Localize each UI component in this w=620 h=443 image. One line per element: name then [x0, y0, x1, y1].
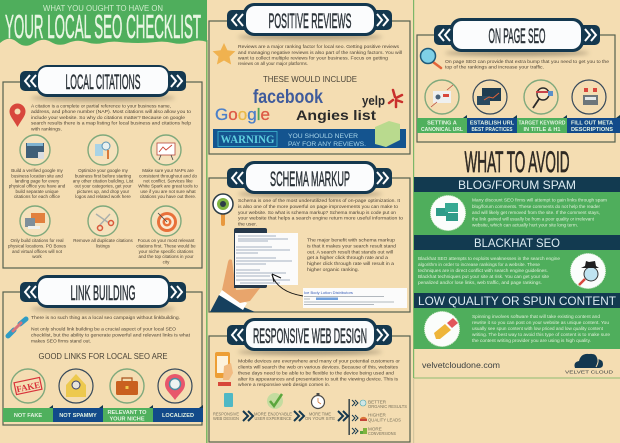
caption: relevant citations: Focus on your most relevant [138, 238, 195, 243]
text: blog spam: blog/forum comments. These comments do not help the reader [472, 204, 600, 209]
text: schema intro [238, 198, 403, 226]
caption: real locations [8, 238, 67, 259]
icon: fake stamp [11, 369, 45, 403]
text: blog spam: and will likely get removed from the site. If the comment stays, [472, 210, 600, 215]
icon: verified location [20, 135, 50, 165]
section: blog forum spam [414, 177, 620, 235]
caption: duplicates: listings [96, 244, 111, 248]
text: citations intro [31, 103, 191, 131]
label: user experience step: MORE ENJOYABLE [254, 412, 292, 416]
text: responsive intro: where a responsive web design comes in. [238, 382, 330, 387]
text: link building intro: Not only should link building be a crucial aspect of your local SEO [31, 327, 176, 332]
labels: on page tactics: CANONICAL URL [421, 127, 464, 133]
caption: optimize: logos and related work here [75, 194, 131, 199]
labels: on page tactics: FILL OUT META [571, 120, 613, 126]
labels: good link qualities: NOT FAKE [14, 413, 42, 419]
caption: optimize: any other citation building. List [73, 178, 134, 184]
heading: responsive web design [227, 318, 392, 355]
text: spun content [472, 314, 610, 343]
text: on page intro: top of the rankings and increase your traffic. [445, 64, 544, 70]
section: blackhat seo: BLACKHAT SEO [474, 236, 560, 250]
labels: on page tactics: BEST PRACTICES [472, 127, 513, 133]
panel: local citations [3, 65, 202, 268]
callout: warning: WARNING [220, 134, 275, 146]
panel: responsive web design [209, 318, 410, 442]
label: user experience step [254, 412, 292, 421]
text: link building intro: makes SEO firms stand out. [31, 338, 91, 343]
text: schema intro: Schema is one of the most underutilized forms of on-page optimization. It [238, 198, 401, 203]
caption: optimize: business first before starting [75, 173, 132, 178]
arrow: step one [243, 411, 253, 421]
logo: facebook: facebook [253, 87, 323, 108]
label: responsive web design step: WEB DESIGN [213, 416, 239, 421]
panel: positive reviews [209, 3, 410, 154]
label: time on site step: MORE TIME [309, 412, 331, 416]
caption: build location: landing page for every [15, 178, 60, 184]
text: responsive intro: these days need to be able to be flexible to the device being used and [238, 370, 394, 376]
caption: build location: build separate unique [15, 189, 59, 194]
text: schema intro: the user. [238, 222, 257, 226]
header banner: WHAT YOU OUGHT TO HAVE ON [43, 4, 163, 13]
section: low quality or spun content: LOW QUALITY OR SPUN CONTENT [418, 294, 617, 308]
text: schema benefit: higher organic ranking. [307, 267, 359, 272]
label: responsive web design step [213, 412, 239, 421]
list: responsive outcomes: CONVERSIONS [368, 431, 396, 436]
labels: on page tactics: IN TITLE & H1 [524, 127, 560, 133]
logo: google: Google [215, 105, 270, 124]
text: spun content: writing. The best way to avoid this type of content is to make sure [472, 332, 610, 337]
text: citations intro: address, and phone number (NAP). Most citations will also allow you to [31, 109, 191, 114]
icon: spy magnifier [570, 254, 606, 288]
caption: consistent NAPs: White Spark are great tools to [138, 184, 198, 188]
text: reviews intro: Reviews are a major ranking factor for local seo. Getting positive reviews [238, 44, 400, 49]
icon: canonical url [425, 80, 459, 114]
text: schema intro: your website. So what is schema markup? Schema markup is code put on [238, 210, 396, 215]
illustration: search result snippet [303, 288, 407, 308]
icon: envelope [59, 369, 93, 403]
heading: schema markup [227, 161, 392, 197]
labels: on page tactics [417, 115, 620, 133]
text: citations intro: A citation is a complete or partial reference to your business name, [31, 103, 171, 108]
text: blackhat: algorithm in order to increase rankings for a website. These [418, 262, 540, 267]
labels: good link qualities: NOT SPAMMY [59, 413, 97, 419]
caption: duplicates: Remove all duplicate citations [73, 238, 134, 243]
caption: consistent NAPs: citations you have out there. [140, 194, 196, 199]
text: blog spam: the link gained will usually be from a poor quality or irrelevant [472, 216, 595, 221]
icon: target keyword [524, 80, 558, 114]
icon: location pin [158, 369, 192, 403]
text: spun content: rewrite it so you can post on your website as unique content. You [472, 320, 609, 325]
caption: consistent NAPs: consistent throughout and do [139, 173, 198, 178]
icon: target [151, 206, 181, 236]
text: reviews intro: and managing negative reviews is also part of the ranking factors. You will [238, 50, 402, 55]
label: time on site step [305, 412, 335, 421]
heading: positive reviews [227, 3, 392, 40]
logo: yelp [362, 90, 402, 108]
subheading: good links: GOOD LINKS FOR LOCAL SEO ARE [38, 351, 168, 361]
text: schema benefit: The major benefit with schema markup [307, 238, 395, 242]
logo: velvet cloud: VELVET CLOUD [565, 370, 614, 374]
text: responsive intro [238, 358, 400, 387]
text: schema benefit [307, 238, 396, 272]
icon: chat bubbles [430, 196, 466, 230]
heading: on page seo [434, 18, 600, 56]
labels: on page tactics: DESCRIPTIONS [571, 127, 613, 133]
label: responsive web design step: RESPONSIVE [213, 412, 239, 416]
icon: tablet [224, 393, 233, 407]
logo: velvet cloud [565, 353, 614, 374]
icon: phone in hand [215, 352, 233, 386]
section: blackhat seo [414, 235, 620, 293]
callout: warning: YOU SHOULD NEVER [288, 133, 358, 140]
text: schema intro: your website that helps a search engine return more useful information to [238, 216, 403, 220]
icon: optimize business [88, 135, 118, 165]
text: link building intro [31, 315, 191, 343]
callout: warning: PAY FOR ANY REVIEWS. [288, 141, 366, 148]
panel: link building [3, 275, 203, 425]
text: responsive intro: alter its appearances and presentation to suit the viewing device. This is [238, 376, 399, 382]
caption: relevant citations: citations first. These would be [136, 244, 196, 248]
caption: real locations: Only build citations for real [10, 238, 64, 243]
list: responsive outcomes: BETTER [368, 400, 387, 404]
caption: optimize: out your categories, get your [74, 184, 132, 188]
text: responsive intro: Mobile devices are everywhere and many of your potential customers or [238, 358, 400, 364]
text: on page intro [445, 59, 609, 70]
text: schema intro: is also one of the more powerful on page improvements you can make to [238, 204, 398, 209]
caption: optimize [73, 168, 134, 199]
text: reviews intro [238, 44, 402, 66]
footer: velvet cloud [414, 353, 620, 378]
labels: on page tactics: SETTING A [427, 120, 457, 126]
panel: schema markup [209, 161, 410, 312]
text: spun content: usually see spun content with low priced and low quality content [472, 326, 604, 331]
illustration: search result snippet: Ice Body Lotion Distributors [304, 290, 353, 295]
icon: chain link [8, 319, 26, 336]
icon: stopwatch [312, 393, 324, 408]
caption: relevant citations: city [163, 260, 170, 264]
heading: local citations: LOCAL CITATIONS [66, 71, 140, 94]
caption: build location: physical office you have and [9, 184, 66, 188]
text: website: velvetcloudone.com [422, 360, 500, 370]
icon: map pin [10, 104, 26, 127]
caption: real locations: work [32, 254, 42, 259]
caption: optimize: Optimize your google my [78, 168, 129, 173]
text: spun content: the content writing provider you are using is high quality. [472, 338, 591, 343]
text: citations intro: search results there is a map listing for local business and citations help [31, 120, 191, 126]
icon: fake stamp: FAKE [15, 380, 41, 394]
caption: relevant citations [136, 238, 196, 264]
list: responsive outcomes: MORE [368, 426, 382, 432]
heading: responsive web design: RESPONSIVE WEB DESIGN [253, 325, 367, 348]
caption: consistent NAPs: not conflict. Services like [143, 178, 193, 184]
labels: on page tactics: ESTABLISH URL [470, 120, 515, 126]
heading: link building: LINK BUILDING [70, 282, 136, 305]
text: spun content: Spinning involves software that will take existing content and [472, 314, 600, 319]
caption: build location: citations for each office [14, 194, 60, 199]
list: responsive outcomes: HIGHER [368, 412, 387, 418]
label: user experience step: USER EXPERIENCE [254, 416, 292, 421]
labels: good link qualities: RELEVANT TO [108, 410, 147, 416]
caption: build location: Build a verified google my [11, 168, 64, 173]
logo: yelp: yelp [362, 93, 385, 108]
icon: real locations [20, 206, 50, 236]
callout: warning [213, 121, 406, 148]
text: blackhat: Blackhat SEO attempts to exploits weaknesses in the search engine [418, 256, 560, 261]
subheading: these would include: THESE WOULD INCLUDE [263, 74, 357, 84]
text: blackhat: Blackhat techniques put your site at risk. You can get your site [418, 274, 549, 279]
caption: consistent NAPs: Make sure your NAPs are [142, 168, 194, 173]
caption: build location: business location site and [11, 173, 63, 178]
text: reviews intro: want to collect multiple reviews for your business. Focus on getting [238, 56, 388, 60]
caption: relevant citations: and the top citations in your [138, 254, 194, 259]
text: on page intro: On page SEO can provide that extra bump that you need to get you to the [445, 59, 609, 64]
icon: check mark [267, 393, 283, 409]
labels: good link qualities: LOCALIZED [162, 413, 194, 419]
illustration: hand holding phone [210, 228, 303, 312]
text: link building intro: checklist, but the ability to generate powerful and relevant links is what [31, 332, 191, 338]
text: citations intro: with rankings. [31, 126, 62, 131]
icon: magnifier [420, 48, 441, 68]
section: blog forum spam: BLOG/FORUM SPAM [458, 178, 576, 192]
label: time on site step: ON YOUR SITE [305, 416, 335, 421]
caption: real locations: and virtual offices will not [12, 249, 63, 254]
text: reviews intro: reviews on all your major platforms. [238, 61, 308, 66]
heading: schema markup: SCHEMA MARKUP [270, 168, 350, 191]
icon: url best practices [473, 80, 507, 114]
text: blog spam [472, 198, 607, 228]
labels: good link qualities: YOUR NICHE [109, 416, 145, 422]
heading: local citations [20, 65, 186, 101]
caption: duplicates [73, 238, 134, 248]
icon: analytics board [151, 135, 181, 165]
section: low quality or spun content [414, 293, 620, 349]
caption: optimize: pictures up, and drop your [77, 189, 130, 194]
icon: pencil and eraser [424, 312, 460, 346]
labels: on page tactics: TARGET KEYWORD [518, 120, 566, 126]
icon: money stack [375, 121, 400, 147]
caption: build location [9, 168, 66, 199]
labels: good link qualities [3, 405, 203, 422]
text: blog spam: website, which can actually hurt your site long term. [472, 222, 578, 228]
icon: meta descriptions [572, 80, 606, 114]
text: schema benefit: higher click through rate will result in a [307, 261, 394, 266]
list: responsive outcomes [348, 399, 407, 436]
text: YOUR LOCAL SEO CHECKLIST [5, 8, 201, 45]
text: responsive intro: clients will search the web on various devices. Because of this, websites [238, 364, 399, 370]
text: blackhat [418, 256, 560, 285]
text: blackhat: penalized and/or lose links, web traffic, and page rankings. [418, 280, 542, 285]
list: responsive outcomes: QUALITY LEADS [368, 418, 401, 422]
text: blog spam: Many discount SEO firms will attempt to gain links through spam [472, 198, 607, 202]
arrow: step three [338, 411, 348, 421]
caption: real locations: physical locations. PO Boxes [8, 244, 67, 248]
logo: angies list: Angies list [296, 107, 376, 123]
icon: scissors [88, 206, 118, 236]
arrow: step two [294, 411, 304, 421]
header banner [0, 0, 207, 46]
heading: positive reviews: POSITIVE REVIEWS [268, 10, 352, 33]
text: schema benefit: get a higher click through rate and a [307, 255, 388, 260]
heading: link building [20, 275, 186, 312]
text: schema benefit: out. A search result that stands out will [307, 250, 393, 254]
panel: on page seo [417, 18, 620, 142]
text: blackhat: techniques are in direct conflict with search engine guidelines. [418, 268, 548, 273]
text: schema benefit: is that it makes your search result stand [307, 244, 396, 248]
text: citations intro: include your website. So why do citations matter? Because on google [31, 115, 185, 120]
text: link building intro: There is no such thing as a local seo campaign without linkbuilding. [31, 315, 180, 320]
caption: relevant citations: your niche specific citations [139, 249, 194, 254]
icon: eye magnifier [213, 194, 233, 226]
caption: consistent NAPs: use if you are not sure what [140, 189, 196, 194]
icon: briefcase [110, 369, 144, 403]
caption: consistent NAPs [138, 168, 198, 199]
icon: star [213, 43, 235, 64]
list: responsive outcomes: ORGANIC RESULTS [368, 404, 407, 409]
